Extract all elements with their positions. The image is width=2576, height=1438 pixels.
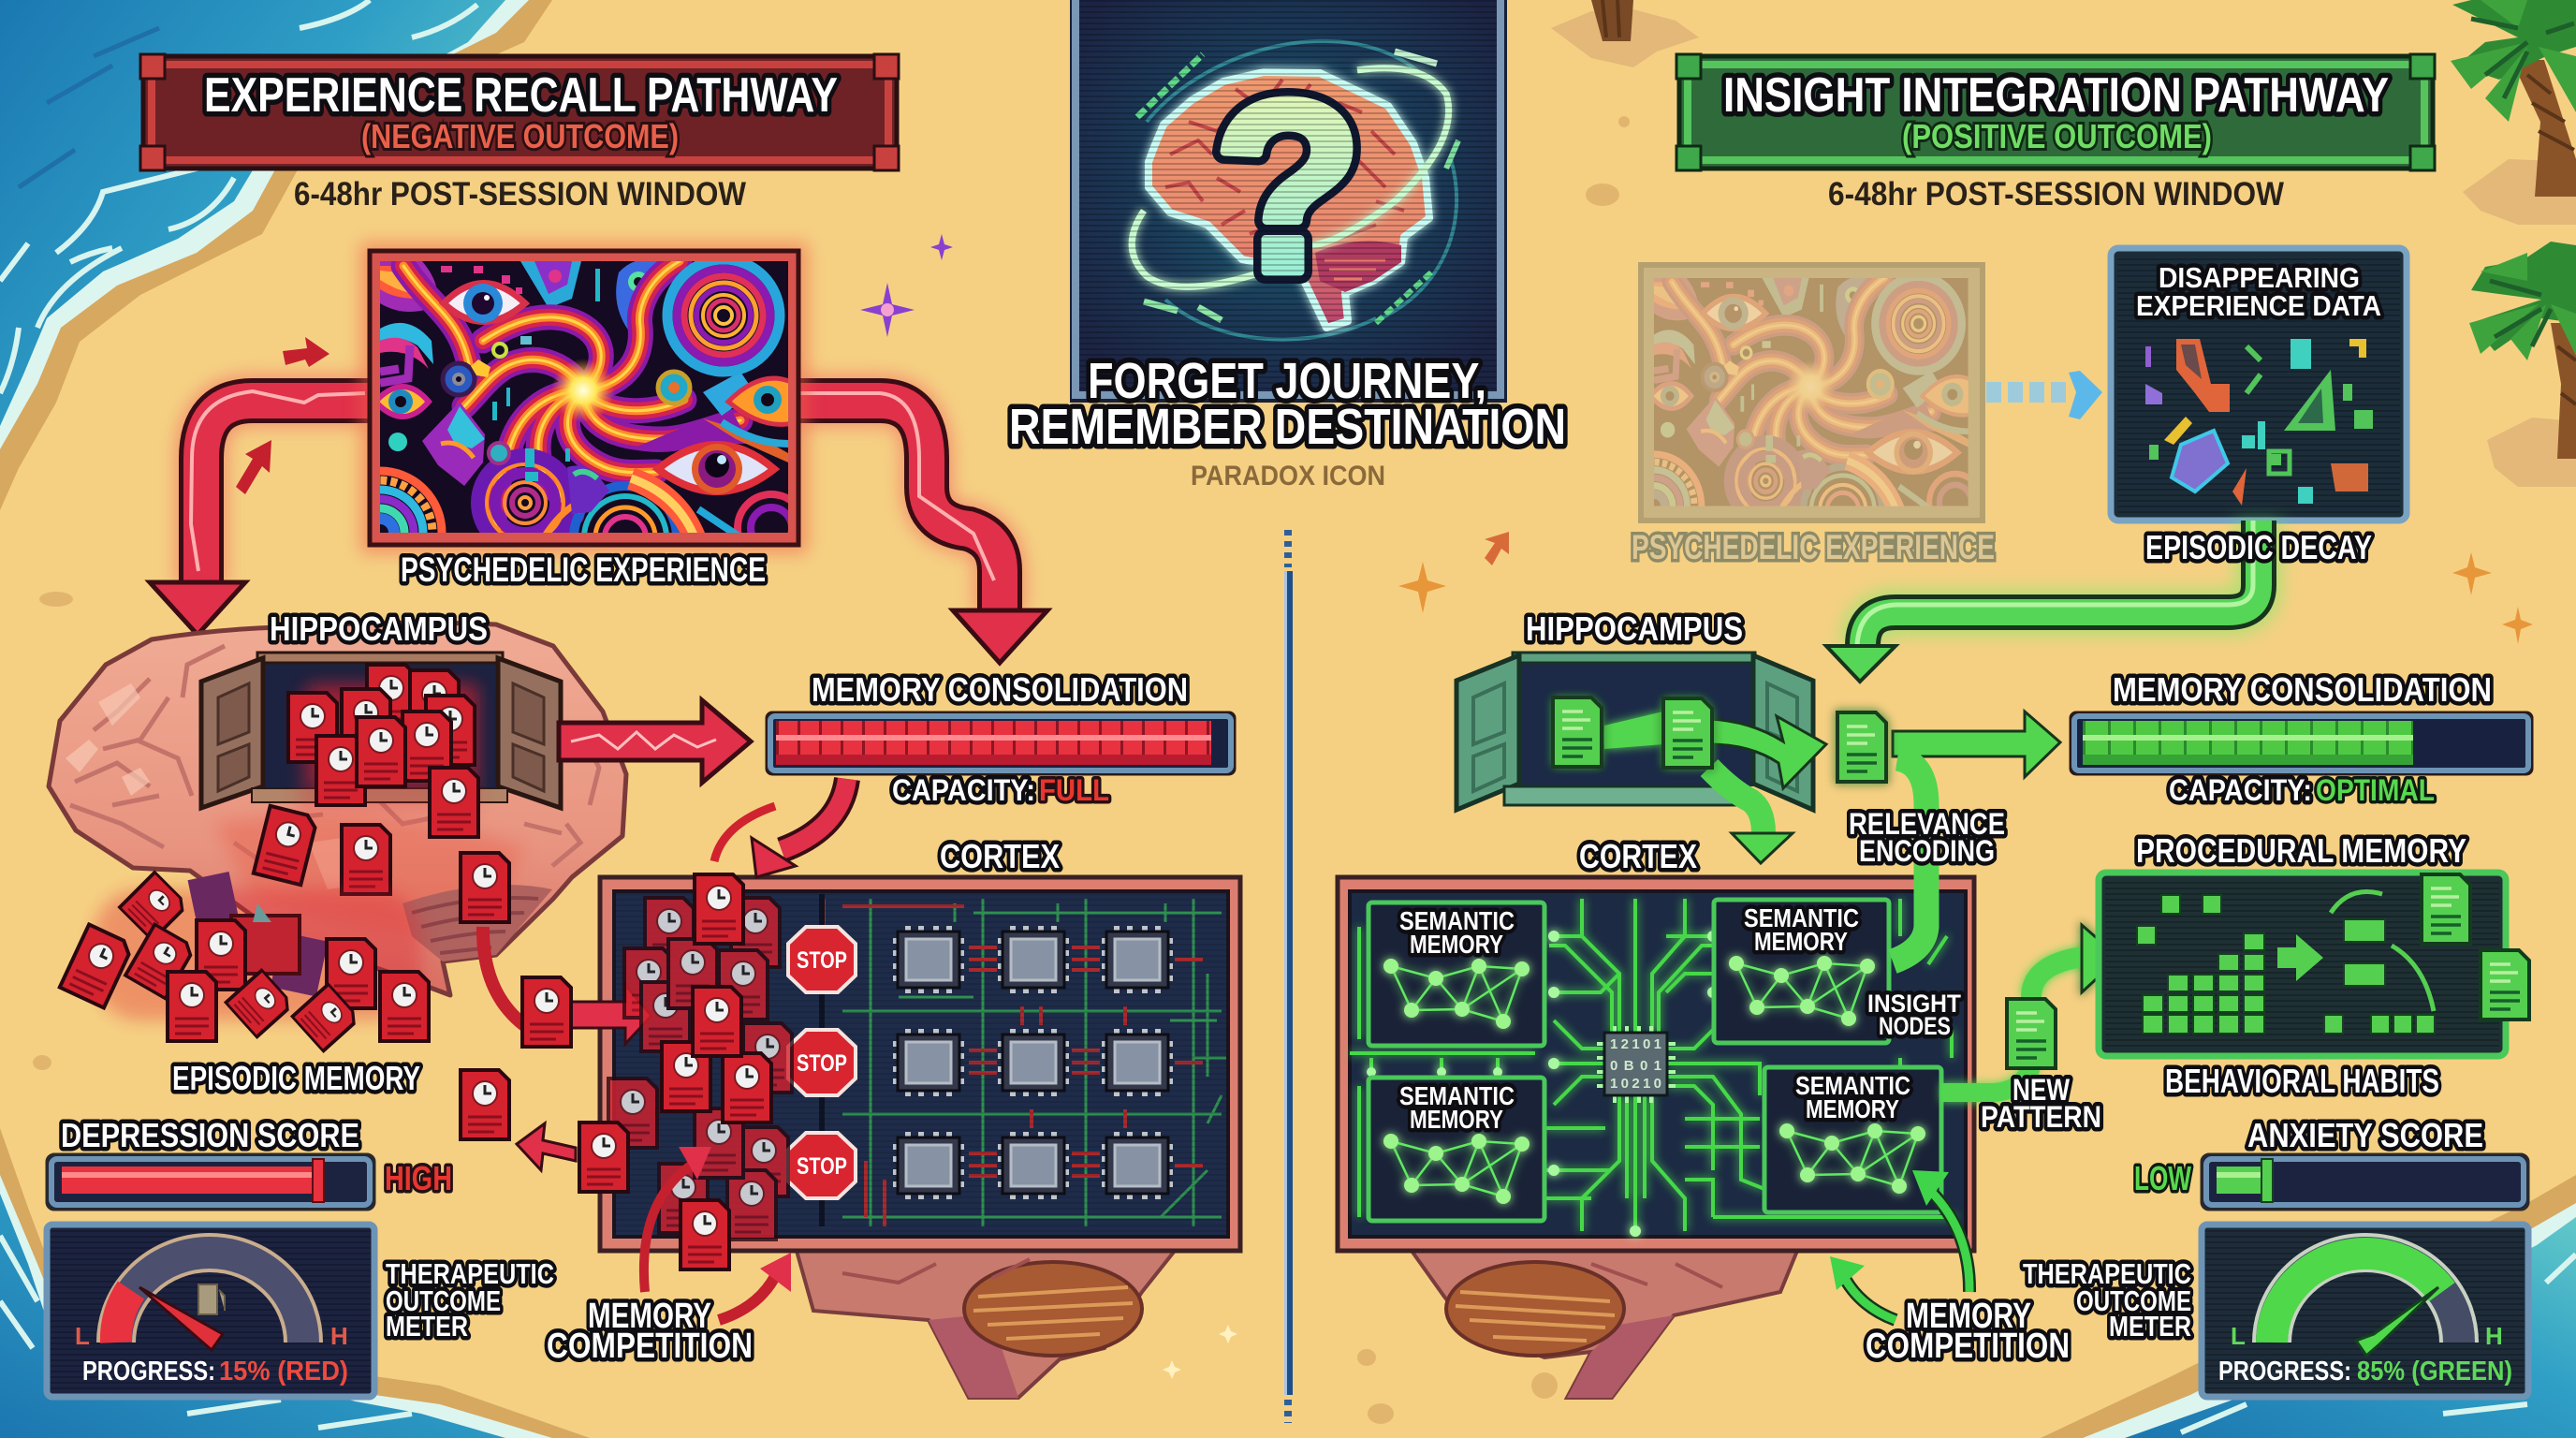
label: right therapeutic outcome meter: OUTCOME bbox=[2076, 1284, 2191, 1317]
gauge: right therapeutic outcome: L bbox=[2231, 1322, 2246, 1350]
arrow: experience to hippocampus bbox=[150, 391, 368, 635]
label: capacity full: CAPACITY: bbox=[892, 773, 1035, 807]
label: left therapeutic outcome meter: METER bbox=[386, 1310, 468, 1343]
procedural green cards bbox=[2422, 874, 2529, 1020]
header: experience recall pathway: EXPERIENCE RECALL PATHWAY bbox=[204, 68, 838, 123]
label: capacity optimal bbox=[2169, 773, 2435, 807]
semantic memory box D bbox=[1764, 1067, 1941, 1212]
panel: disappearing experience data bbox=[2111, 248, 2407, 521]
label: right memory competition bbox=[1866, 1297, 2070, 1366]
bar: left memory consolidation bbox=[767, 712, 1235, 774]
organized blocks bbox=[2324, 919, 2435, 1034]
center chip: 10210 bbox=[1610, 1076, 1661, 1092]
green card: new pattern bbox=[2007, 999, 2056, 1068]
panel: disappearing experience data: DISAPPEARING bbox=[2159, 261, 2360, 294]
faded psychedelic experience image bbox=[1606, 265, 1983, 558]
semantic memory box A bbox=[1368, 902, 1544, 1046]
label: left memory consolidation: MEMORY CONSOLIDATION bbox=[812, 670, 1188, 709]
episodic memory pile bbox=[60, 872, 429, 1051]
sparkles: orange right bbox=[1398, 552, 2533, 644]
gauge: right therapeutic outcome: 85% (GREEN) bbox=[2357, 1357, 2512, 1387]
label: left hippocampus: HIPPOCAMPUS bbox=[270, 609, 488, 648]
arrow: consolidation to cortex bbox=[714, 779, 847, 877]
arrow: dashed decay bbox=[1986, 371, 2102, 419]
icon: cerebellum bbox=[1315, 242, 1401, 292]
label: left memory competition: COMPETITION bbox=[547, 1327, 753, 1366]
label: capacity optimal: CAPACITY: bbox=[2169, 773, 2312, 807]
beach: top-left sea bbox=[0, 0, 552, 510]
arrow fragment: small orange bbox=[1485, 532, 1509, 565]
label: insight nodes bbox=[1867, 990, 1961, 1040]
bar: right memory consolidation bbox=[2071, 712, 2532, 774]
palm: top right bbox=[2451, 0, 2576, 225]
icon: question mark: ? bbox=[1213, 50, 1363, 324]
header: insight integration pathway: (POSITIVE OUTCOME) bbox=[1902, 117, 2212, 155]
label: right memory competition: MEMORY bbox=[1906, 1297, 2031, 1336]
beach: bottom-right sea bbox=[2041, 1175, 2576, 1438]
label: left therapeutic outcome meter bbox=[386, 1257, 554, 1343]
label: right memory consolidation: MEMORY CONSOLIDATION bbox=[2113, 670, 2492, 709]
label: procedural memory: PROCEDURAL MEMORY bbox=[2136, 831, 2466, 870]
divider bbox=[1284, 530, 1293, 1423]
sparkle: purple small bbox=[930, 234, 953, 260]
brain lobes below panel bbox=[1412, 1251, 1797, 1398]
semantic memory box A: SEMANTIC bbox=[1399, 906, 1515, 935]
circuit nodes bbox=[1367, 931, 1719, 1237]
label: new pattern: NEW bbox=[2012, 1073, 2071, 1107]
arrow: experience to memory consolidation bbox=[800, 393, 1047, 663]
gauge: left therapeutic outcome: H bbox=[330, 1322, 348, 1350]
semantic memory box B bbox=[1714, 900, 1889, 1043]
icon: orbit ring bbox=[1132, 68, 1449, 286]
right hippocampus doorway bbox=[1456, 653, 1813, 810]
label: high: HIGH bbox=[385, 1159, 452, 1197]
icon: rings behind brain bbox=[1137, 41, 1458, 340]
arrow: decay to hippocampus bbox=[1826, 521, 2259, 682]
label: relevance encoding bbox=[1849, 807, 2005, 868]
arrow: doors to consolidation bbox=[559, 700, 751, 783]
center chip: 0B01 bbox=[1610, 1058, 1661, 1074]
central panel: paradox icon bbox=[1070, 0, 1507, 403]
gauge: left therapeutic outcome: PROGRESS: bbox=[82, 1357, 215, 1387]
label: right hippocampus: HIPPOCAMPUS bbox=[1526, 609, 1743, 648]
label: low: LOW bbox=[2134, 1159, 2191, 1197]
subheading: right window: 6-48hr POST-SESSION WINDOW bbox=[1828, 176, 2284, 213]
semantic memory box A: MEMORY bbox=[1410, 930, 1503, 959]
label: right memory competition: COMPETITION bbox=[1866, 1327, 2070, 1366]
label: relevance encoding: RELEVANCE bbox=[1849, 807, 2005, 841]
semantic memory box C bbox=[1368, 1078, 1544, 1221]
sparkle: purple large bbox=[860, 283, 915, 337]
gauge: right therapeutic outcome bbox=[2202, 1225, 2528, 1397]
label: right cortex: CORTEX bbox=[1579, 837, 1697, 875]
label: new pattern: PATTERN bbox=[1981, 1100, 2101, 1134]
label: left cortex: CORTEX bbox=[940, 837, 1060, 875]
data fragments bbox=[2145, 339, 2373, 506]
left cortex circuitry bbox=[822, 894, 1226, 1226]
gauge: left therapeutic outcome bbox=[47, 1225, 374, 1397]
label: insight nodes: NODES bbox=[1879, 1012, 1951, 1040]
caption: paradox icon: PARADOX ICON bbox=[1191, 461, 1385, 492]
arrows: left memory competition bbox=[644, 1147, 791, 1320]
label: anxiety score: ANXIETY SCORE bbox=[2247, 1116, 2483, 1154]
label: right therapeutic outcome meter bbox=[2023, 1257, 2191, 1343]
beach: bottom-left sea bbox=[0, 1128, 590, 1438]
label: behavioral habits: BEHAVIORAL HABITS bbox=[2165, 1062, 2439, 1100]
sparkles: bottom centre bbox=[1163, 1325, 1237, 1379]
bar: depression score bbox=[47, 1154, 374, 1210]
panel: procedural memory bbox=[2099, 873, 2506, 1056]
stop signs bbox=[788, 927, 856, 1198]
stop signs: STOP bbox=[797, 1050, 847, 1077]
psychedelic experience image bbox=[318, 242, 808, 594]
label: left memory competition bbox=[547, 1297, 753, 1366]
label: insight nodes: INSIGHT bbox=[1867, 990, 1961, 1018]
left cortex panel bbox=[600, 877, 1240, 1398]
label: relevance encoding: ENCODING bbox=[1859, 834, 1995, 868]
left brain bbox=[49, 623, 626, 995]
brain: striped lobe bbox=[402, 885, 552, 961]
label: left therapeutic outcome meter: THERAPEUTIC bbox=[386, 1257, 554, 1290]
arrow fragment: small red bbox=[283, 337, 329, 367]
right cortex panel bbox=[1338, 758, 2529, 1398]
label: left memory competition: MEMORY bbox=[588, 1297, 711, 1336]
arrow: relevance encoding connector bbox=[1893, 758, 1926, 961]
header: insight integration pathway bbox=[1676, 54, 2435, 170]
central title bbox=[1009, 353, 1566, 455]
arrow: new pattern flow bbox=[1941, 925, 2119, 1093]
icon: question mark: ? bbox=[1213, 50, 1363, 324]
subheading: left window: 6-48hr POST-SESSION WINDOW bbox=[294, 176, 746, 213]
label: depression score: DEPRESSION SCORE bbox=[61, 1116, 359, 1154]
semantic memory box D: SEMANTIC bbox=[1795, 1071, 1910, 1100]
palm: top small trunk bbox=[1551, 0, 1699, 67]
arrow: brain to cortex via card bbox=[483, 927, 651, 1170]
panel: disappearing experience data: EXPERIENCE DATA bbox=[2136, 289, 2381, 322]
stop signs: STOP bbox=[797, 1153, 847, 1180]
gauge: right therapeutic outcome: H bbox=[2485, 1322, 2503, 1350]
label: faded psychedelic experience: PSYCHEDELIC EXPERIENCE bbox=[1632, 528, 1995, 566]
gauge: left therapeutic outcome: L bbox=[75, 1322, 90, 1350]
brain lobes below panel bbox=[797, 1251, 1175, 1398]
header: experience recall pathway: (NEGATIVE OUTCOME) bbox=[361, 117, 679, 155]
semantic memory box C: SEMANTIC bbox=[1399, 1081, 1515, 1110]
semantic memory box B: SEMANTIC bbox=[1744, 903, 1859, 932]
palm: right bbox=[2469, 242, 2576, 487]
memory cards: spilling into cortex bbox=[461, 853, 792, 1269]
label: new pattern bbox=[1981, 1073, 2101, 1134]
header: insight integration pathway: INSIGHT INTEGRATION PATHWAY bbox=[1723, 68, 2389, 123]
gauge: right therapeutic outcome: PROGRESS: bbox=[2218, 1357, 2351, 1387]
arrow: habit formation bbox=[2277, 934, 2323, 981]
gauge: left therapeutic outcome: 15% (RED) bbox=[219, 1357, 348, 1387]
right cortex circuitry bbox=[1350, 899, 1956, 1231]
chips grid bbox=[893, 926, 1173, 1199]
stop signs: STOP bbox=[797, 947, 847, 974]
semantic memory box D: MEMORY bbox=[1806, 1094, 1899, 1123]
center chip bbox=[1597, 1026, 1676, 1103]
label: psychedelic experience: PSYCHEDELIC EXPERIENCE bbox=[401, 550, 766, 589]
arrows: right memory competition bbox=[1830, 1170, 1969, 1320]
central title: FORGET JOURNEY, bbox=[1088, 353, 1486, 409]
label: capacity optimal: OPTIMAL bbox=[2316, 773, 2435, 807]
label: left therapeutic outcome meter: OUTCOME bbox=[386, 1284, 501, 1317]
arrow fragment: small red lower bbox=[236, 440, 271, 494]
label: right therapeutic outcome meter: METER bbox=[2109, 1310, 2191, 1343]
arrow: right card flow bbox=[1604, 712, 2060, 863]
label: episodic memory: EPISODIC MEMORY bbox=[172, 1059, 420, 1097]
green memory cards bbox=[1553, 697, 1886, 782]
left hippocampus doorway bbox=[201, 653, 561, 808]
bar: anxiety score bbox=[2202, 1154, 2528, 1210]
center chip: 12101 bbox=[1610, 1036, 1661, 1052]
semantic memory box C: MEMORY bbox=[1410, 1105, 1503, 1134]
memory cards: left flood bbox=[254, 665, 509, 922]
semantic memory box B: MEMORY bbox=[1754, 927, 1848, 956]
icon: brain bbox=[1149, 72, 1429, 328]
label: capacity full: FULL bbox=[1039, 773, 1109, 807]
central title: REMEMBER DESTINATION bbox=[1009, 399, 1566, 455]
label: right therapeutic outcome meter: THERAPEUTIC bbox=[2023, 1257, 2191, 1290]
block staircase bbox=[2137, 895, 2264, 1034]
header: experience recall pathway bbox=[140, 54, 899, 170]
label: episodic decay: EPISODIC DECAY bbox=[2145, 528, 2372, 566]
